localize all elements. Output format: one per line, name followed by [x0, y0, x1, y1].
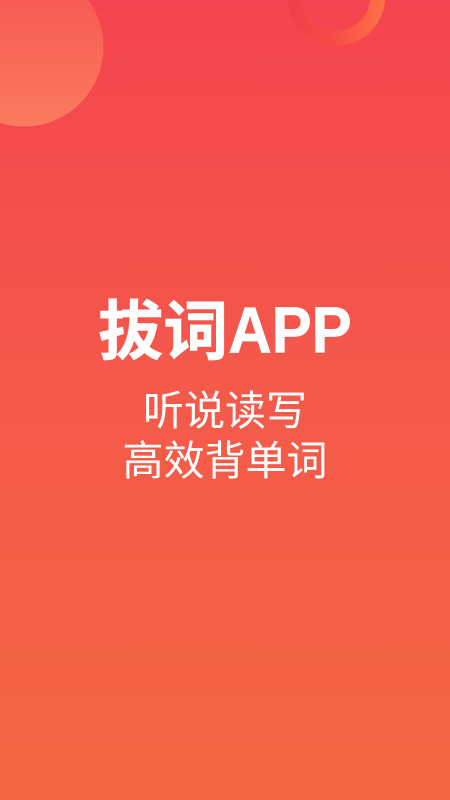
subtitle line 1: 听说读写: [143, 377, 307, 437]
title: 拔词: [98, 295, 228, 368]
icon: large circle: [0, 0, 104, 126]
title: APP: [228, 294, 352, 367]
title: [98, 294, 352, 368]
icon: ring: [294, 0, 378, 38]
subtitle line 2: 高效背单词: [122, 427, 328, 487]
